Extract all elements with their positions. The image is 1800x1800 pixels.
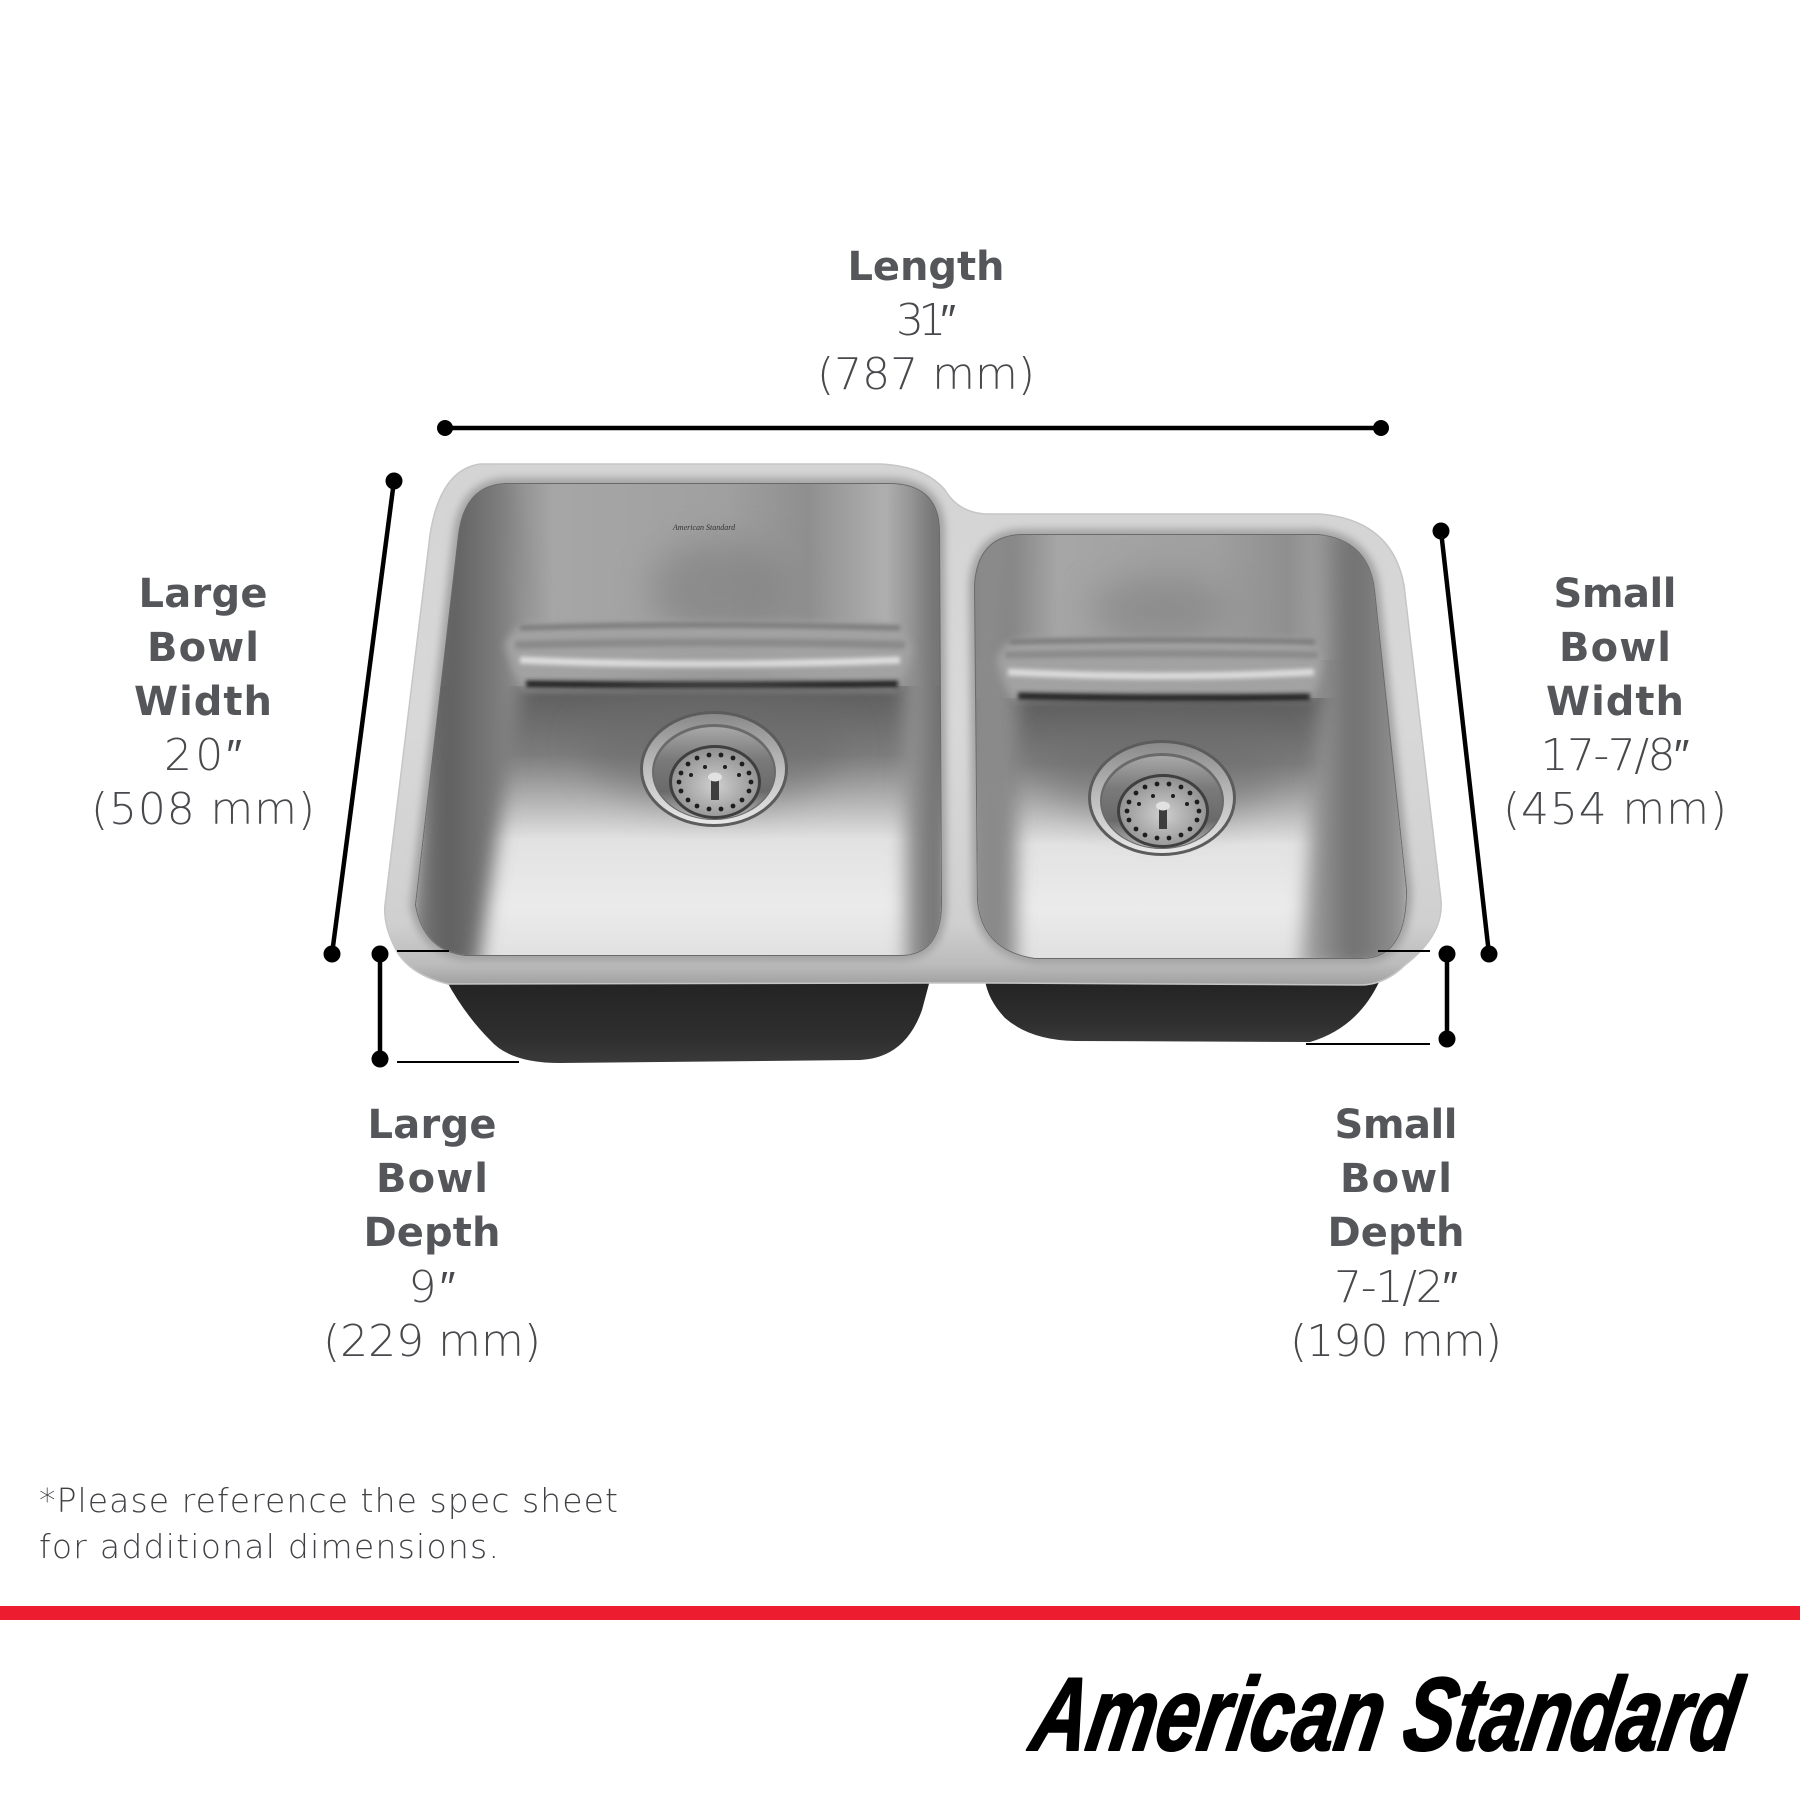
- flange shading near left bowl: [416, 484, 941, 955]
- small bowl left wall: [965, 525, 1018, 970]
- large bowl shelf mid band: [515, 642, 905, 645]
- small bowl interior: [965, 525, 1415, 970]
- label: large bowl depth: (229 mm): [323, 1316, 541, 1367]
- large bowl right wall: [894, 485, 941, 955]
- large bowl shelf body: [505, 622, 912, 690]
- small bowl floor shadow around drain: [1046, 764, 1278, 828]
- large bowl shelf highlight: [520, 660, 900, 664]
- label: large bowl width: Bowl: [147, 625, 259, 671]
- footnote: *Please reference the spec sheet: [39, 1481, 618, 1520]
- label: large bowl depth: 9″: [408, 1262, 456, 1313]
- footnote: [39, 1481, 618, 1566]
- large bowl floor shadow around drain: [584, 685, 844, 805]
- large bowl shelf shadow: [526, 684, 898, 685]
- large bowl floor: [410, 686, 945, 961]
- label: small bowl depth: Small: [1334, 1102, 1458, 1148]
- label: large bowl width: Width: [134, 679, 272, 725]
- red divider bar: [0, 1606, 1800, 1620]
- label: small bowl width: 17-7/8″: [1540, 730, 1690, 781]
- stainless flange: [385, 464, 1441, 985]
- dimension line: large bowl depth: [372, 946, 519, 1068]
- label: large bowl depth: [323, 1102, 541, 1367]
- large bowl back wall: [498, 484, 922, 624]
- label: length: Length: [848, 244, 1004, 290]
- label: small bowl width: Bowl: [1559, 625, 1671, 671]
- dimension line: small bowl width: [1432, 522, 1498, 962]
- label: small bowl depth: (190 mm): [1290, 1316, 1502, 1367]
- sink product photo: [385, 464, 1441, 1063]
- large bowl drain: [640, 711, 788, 827]
- large bowl black exterior: [446, 980, 930, 1063]
- dimension line: small bowl depth: [1306, 946, 1456, 1048]
- tiny engraved logo: American Standard: [672, 523, 736, 532]
- dimension line: large bowl width: [324, 472, 402, 962]
- label: large bowl width: [91, 571, 315, 835]
- label: large bowl depth: Large: [368, 1102, 496, 1148]
- dimension line: length: [437, 420, 1389, 436]
- label: length: [817, 244, 1035, 400]
- label: large bowl width: 20″: [164, 730, 242, 781]
- small bowl right wall: [1300, 525, 1415, 970]
- footnote: for additional dimensions.: [39, 1527, 499, 1566]
- large bowl shelf top crease: [520, 625, 900, 628]
- label: large bowl width: Large: [138, 571, 268, 617]
- label: small bowl width: Small: [1554, 571, 1676, 617]
- label: small bowl width: Width: [1546, 679, 1684, 725]
- small bowl shelf body: [997, 638, 1323, 700]
- small bowl shelf mid band: [1005, 654, 1318, 655]
- label: small bowl depth: [1290, 1102, 1502, 1367]
- small bowl floor: [970, 698, 1410, 960]
- label: small bowl width: (454 mm): [1503, 784, 1727, 835]
- label: length: 31″: [896, 295, 956, 346]
- flange shading near right bowl: [975, 535, 1406, 958]
- label: small bowl depth: Bowl: [1340, 1156, 1452, 1202]
- large bowl interior: [405, 475, 950, 970]
- label: small bowl width: [1503, 571, 1727, 835]
- label: small bowl depth: 7-1/2″: [1334, 1262, 1458, 1313]
- large bowl back wall reflection: [647, 536, 782, 621]
- label: large bowl depth: Bowl: [376, 1156, 488, 1202]
- small bowl shelf highlight: [1008, 672, 1314, 676]
- small bowl drain: [1088, 740, 1236, 856]
- label: small bowl depth: Depth: [1328, 1210, 1464, 1256]
- small bowl back wall reflection: [1092, 570, 1224, 636]
- large bowl left wall: [416, 486, 528, 955]
- small bowl back wall: [1006, 535, 1382, 659]
- label: large bowl width: (508 mm): [91, 784, 315, 835]
- small bowl shelf shadow: [1018, 696, 1310, 698]
- small bowl black exterior: [985, 980, 1380, 1042]
- small bowl shelf top crease: [1010, 640, 1315, 642]
- label: large bowl depth: Depth: [364, 1210, 500, 1256]
- label: length: (787 mm): [817, 349, 1035, 400]
